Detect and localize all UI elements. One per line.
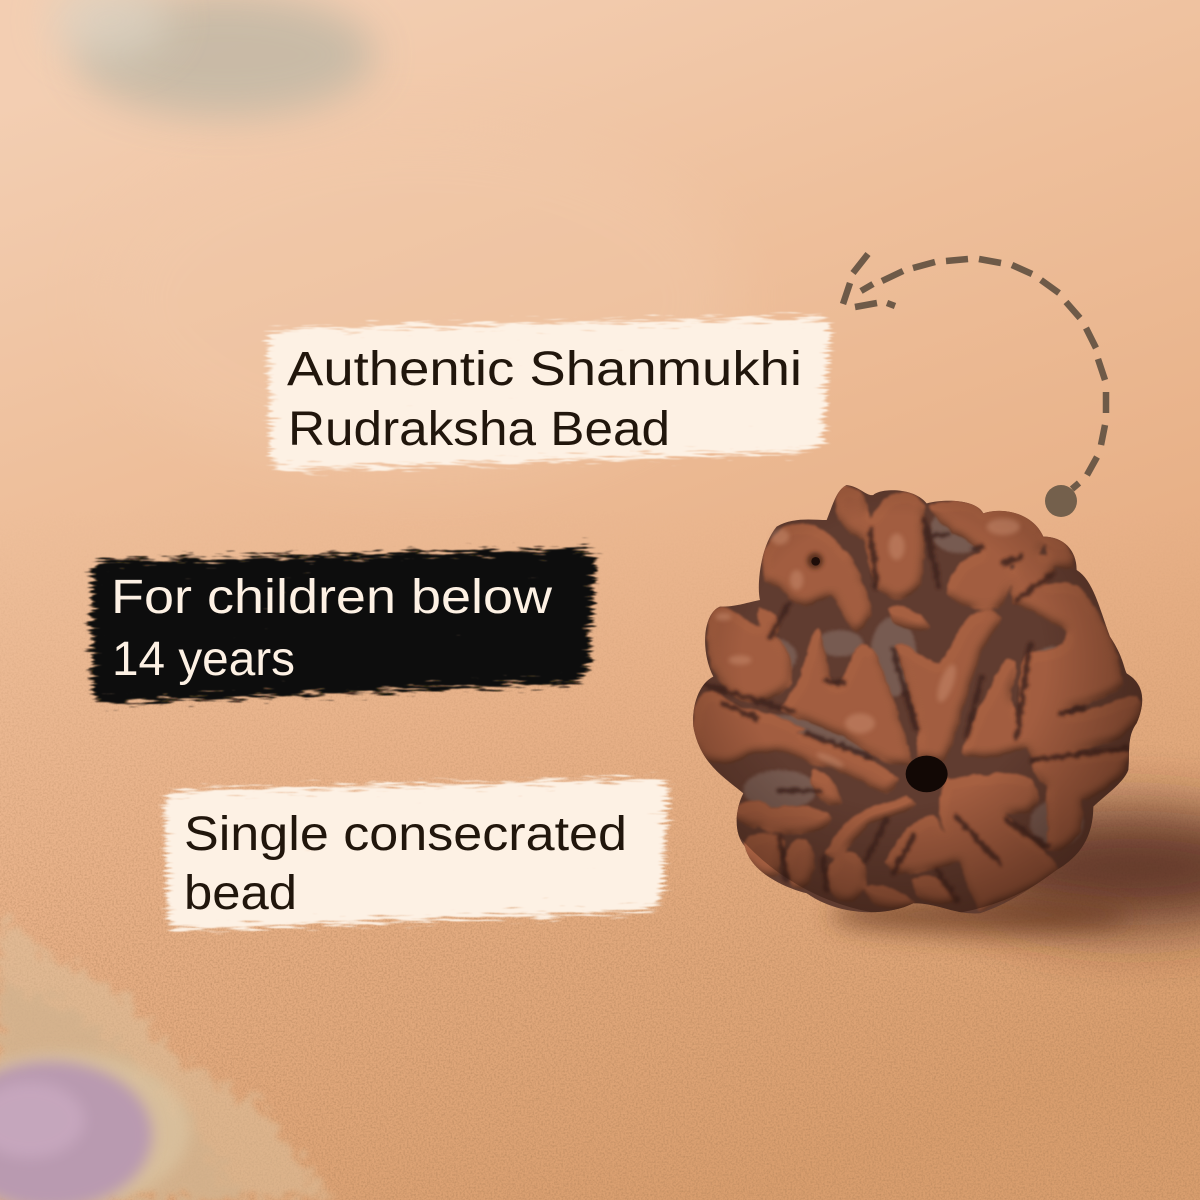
black brush stroke bbox=[90, 547, 598, 705]
label 2: For children below 14 years: 14 years bbox=[112, 633, 295, 686]
label 1: Authentic Shanmukhi Rudraksha Bead bbox=[266, 316, 832, 472]
dark creases and pits bbox=[700, 520, 1127, 900]
bead body and recesses bbox=[693, 485, 1142, 913]
cream brush stroke bbox=[163, 777, 670, 932]
label 2: For children below 14 years: For children below bbox=[111, 571, 552, 624]
blurred textile and purple stone, bottom left bbox=[0, 915, 330, 1200]
label 1: Authentic Shanmukhi Rudraksha Bead: Rudraksha Bead bbox=[288, 403, 670, 456]
label 3: Single consecrated bead: bead bbox=[184, 867, 297, 920]
small top hole bbox=[807, 553, 823, 569]
glossy highlights bbox=[715, 518, 1020, 770]
start dot bbox=[1045, 485, 1077, 517]
shading around the ball bbox=[687, 477, 1147, 917]
central drill hole bbox=[906, 756, 948, 792]
arrow head bbox=[843, 254, 895, 307]
bead ridges bbox=[693, 486, 1140, 910]
label 1: Authentic Shanmukhi Rudraksha Bead: Authentic Shanmukhi bbox=[287, 343, 802, 396]
rudraksha bead bbox=[687, 477, 1147, 917]
blurred grey object, top left bbox=[50, 0, 375, 117]
bead shadow bbox=[830, 810, 1200, 935]
grey fuzz in recesses bbox=[737, 507, 1083, 847]
cream brush stroke bbox=[266, 316, 832, 472]
label 2: For children below 14 years bbox=[90, 547, 598, 705]
label 3: Single consecrated bead bbox=[163, 777, 670, 932]
label 3: Single consecrated bead: Single consecrated bbox=[184, 808, 627, 861]
dashed arrow from bead up to first label bbox=[843, 254, 1106, 517]
